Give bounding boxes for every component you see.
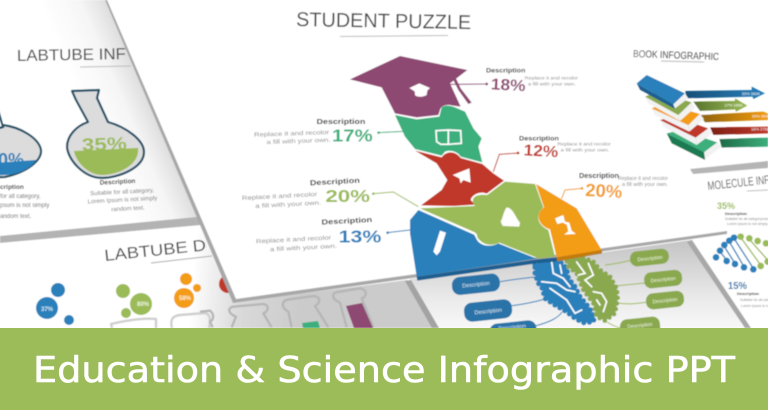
icon: open book [436, 130, 461, 144]
text block: green flask description: Suitable for all category, [90, 188, 155, 197]
label: description 12 percent: Replace it and recolor [557, 141, 611, 147]
pill: green description 4: Description [627, 322, 653, 330]
flask: green 35 percent: 35% [81, 133, 127, 155]
slide: brain diagram (lower centre) [405, 240, 750, 344]
divider bar [690, 161, 768, 174]
flask: blue partial [0, 110, 41, 178]
label: description 13 percent [256, 215, 381, 253]
icon: desk lamp [555, 215, 576, 235]
text block: left flask description: for all category, [0, 194, 41, 200]
label: description 13 percent: a fill with your own. [270, 244, 338, 253]
brain: blue lobe [535, 260, 594, 323]
book: teal [667, 130, 722, 160]
text block: green flask description [87, 177, 158, 214]
pill: blue description 2 [463, 299, 513, 322]
label: description 20 percent orange: a fill with your own. [622, 182, 668, 188]
test tube bar: purple [346, 303, 373, 328]
puzzle piece: blue pencil [410, 210, 537, 277]
label: description 18 percent: Replace it and recolor [525, 75, 578, 81]
text block: green flask description: Description [100, 178, 136, 187]
label: description 17 percent [254, 119, 373, 146]
text block: left flask description: psum is not simply [0, 203, 49, 209]
text block: left flask description [0, 184, 49, 220]
label: description 20 percent orange: Description [579, 173, 619, 180]
pill: blue description 1 [451, 273, 501, 296]
icon: graduation cap [409, 83, 430, 97]
label: description 18 percent [486, 68, 578, 95]
book: orange [652, 103, 704, 132]
pill: green description 1 [629, 248, 670, 267]
pill: blue description 3 [489, 320, 538, 344]
label: description 18 percent: a fill with your own. [528, 81, 576, 87]
label: description 13 percent: Replace it and recolor [256, 235, 331, 245]
icon: bell [501, 207, 520, 227]
label: description 17 percent: Description [317, 119, 365, 126]
banner title: Education & Science Infographic PPT [33, 350, 736, 391]
icon: pencil [433, 231, 446, 255]
text block: green flask description: Lorem Ipsum is not simply [88, 196, 158, 205]
label: description 12 percent: a fill with your own. [561, 147, 609, 153]
icon: paper plane [453, 168, 471, 183]
label: description 17 percent: Replace it and recolor [254, 130, 329, 139]
bubbles: blue 37 percent: 37% [41, 307, 54, 313]
bubble: red partial [219, 275, 237, 293]
label: description 12 percent: Description [519, 136, 559, 143]
stat: 15 percent: 15% [728, 281, 747, 292]
puzzle piece: orange lamp [536, 184, 602, 257]
puzzle piece: red paper plane [415, 151, 504, 206]
slide divider [405, 280, 439, 328]
stat: 35 percent: 35% [717, 201, 735, 211]
pill: blue description 3: Description [498, 324, 526, 332]
label: description 20 percent orange [579, 173, 668, 202]
label: description 20 percent green: a fill with your own. [255, 201, 322, 210]
bubbles: green 80 percent [116, 284, 152, 318]
pill: green description 4 [619, 316, 661, 338]
text block: molecule description [737, 291, 768, 308]
book: green [645, 92, 695, 121]
text block: molecule upper description [725, 211, 768, 226]
label: description 17 percent: a fill with your own. [267, 138, 331, 146]
connectors: puzzle leader lines [372, 83, 583, 234]
arrow: blue: 33% 3604 [742, 91, 760, 96]
dna helix [713, 233, 768, 273]
pill: green description 2 [643, 269, 683, 289]
bubbles: orange 58 percent [174, 273, 201, 308]
pill: green description 2: Description [650, 276, 676, 284]
banner: green title strip [0, 328, 768, 410]
slide: labtube diagram (lower left) [0, 225, 436, 328]
slide title: labtube inf: LABTUBE INF [17, 46, 126, 65]
puzzle piece: lime bell [420, 182, 555, 259]
test tube bar: green [302, 321, 320, 328]
slide title: labtube d: LABTUBE D [104, 237, 207, 265]
label: description 18 percent: Description [486, 68, 525, 75]
label: description 12 percent [519, 136, 611, 161]
label: description 20 percent orange: 20% [585, 180, 623, 202]
text block: molecule upper description: Description [725, 211, 748, 216]
slide title: student puzzle: STUDENT PUZZLE [296, 9, 471, 34]
connector lines: brain [498, 260, 648, 328]
puzzle: student puzzle pieces [350, 56, 602, 281]
arrows and book stack [637, 75, 768, 160]
label: description 12 percent: 12% [523, 142, 559, 161]
pill: green description 3 [645, 290, 685, 310]
bubbles: orange 58 percent: 58% [179, 296, 192, 302]
label: description 20 percent green: Description [310, 176, 361, 187]
label: description 13 percent: 13% [339, 227, 381, 247]
text block: green flask description: random text. [111, 205, 145, 213]
book: blue top [637, 75, 688, 109]
label: description 17 percent: 17% [332, 125, 373, 145]
puzzle base edge [417, 249, 602, 281]
test tubes [111, 288, 373, 328]
text block: molecule description: Description [737, 291, 760, 296]
text block: left flask description: cription [0, 184, 24, 191]
slide: book infographic (top right) [633, 49, 768, 226]
label: description 20 percent green: Replace it and recolor [242, 192, 317, 202]
text block: left flask description: andom text. [0, 214, 32, 220]
label: description 18 percent: 18% [490, 76, 526, 95]
brain: green lobe [567, 257, 618, 321]
puzzle piece: green book [395, 106, 482, 162]
label: description 20 percent green [242, 176, 370, 210]
pill: green description 1: Description [637, 255, 663, 263]
arrow: teal [719, 138, 768, 148]
label: description 13 percent: Description [321, 215, 373, 227]
pill: green description 3: Description [652, 297, 678, 305]
flask: green 35 percent [67, 90, 144, 178]
bubbles: green 80 percent: 80% [137, 302, 150, 308]
slide: molecule infographic (right) [687, 225, 768, 328]
slide: labtube infographic (top left) [0, 0, 202, 243]
arrow: green: 17% 1856 [724, 102, 743, 107]
label: description 20 percent green: 20% [325, 186, 370, 206]
slide title: book infographic: BOOK INFOGRAPHIC [633, 49, 719, 63]
puzzle piece: purple cap [350, 56, 472, 117]
book: red [660, 117, 712, 145]
slide: student puzzle (centre main) [105, 0, 768, 303]
bubbles: blue 37 percent [36, 283, 74, 325]
pill: blue description 1: Description [462, 281, 490, 290]
label: description 20 percent orange: Replace it and recolor [618, 176, 668, 182]
text block: molecule upper description: Lorem Ipsum is not simply [727, 222, 768, 226]
pill: blue description 2: Description [474, 308, 502, 316]
